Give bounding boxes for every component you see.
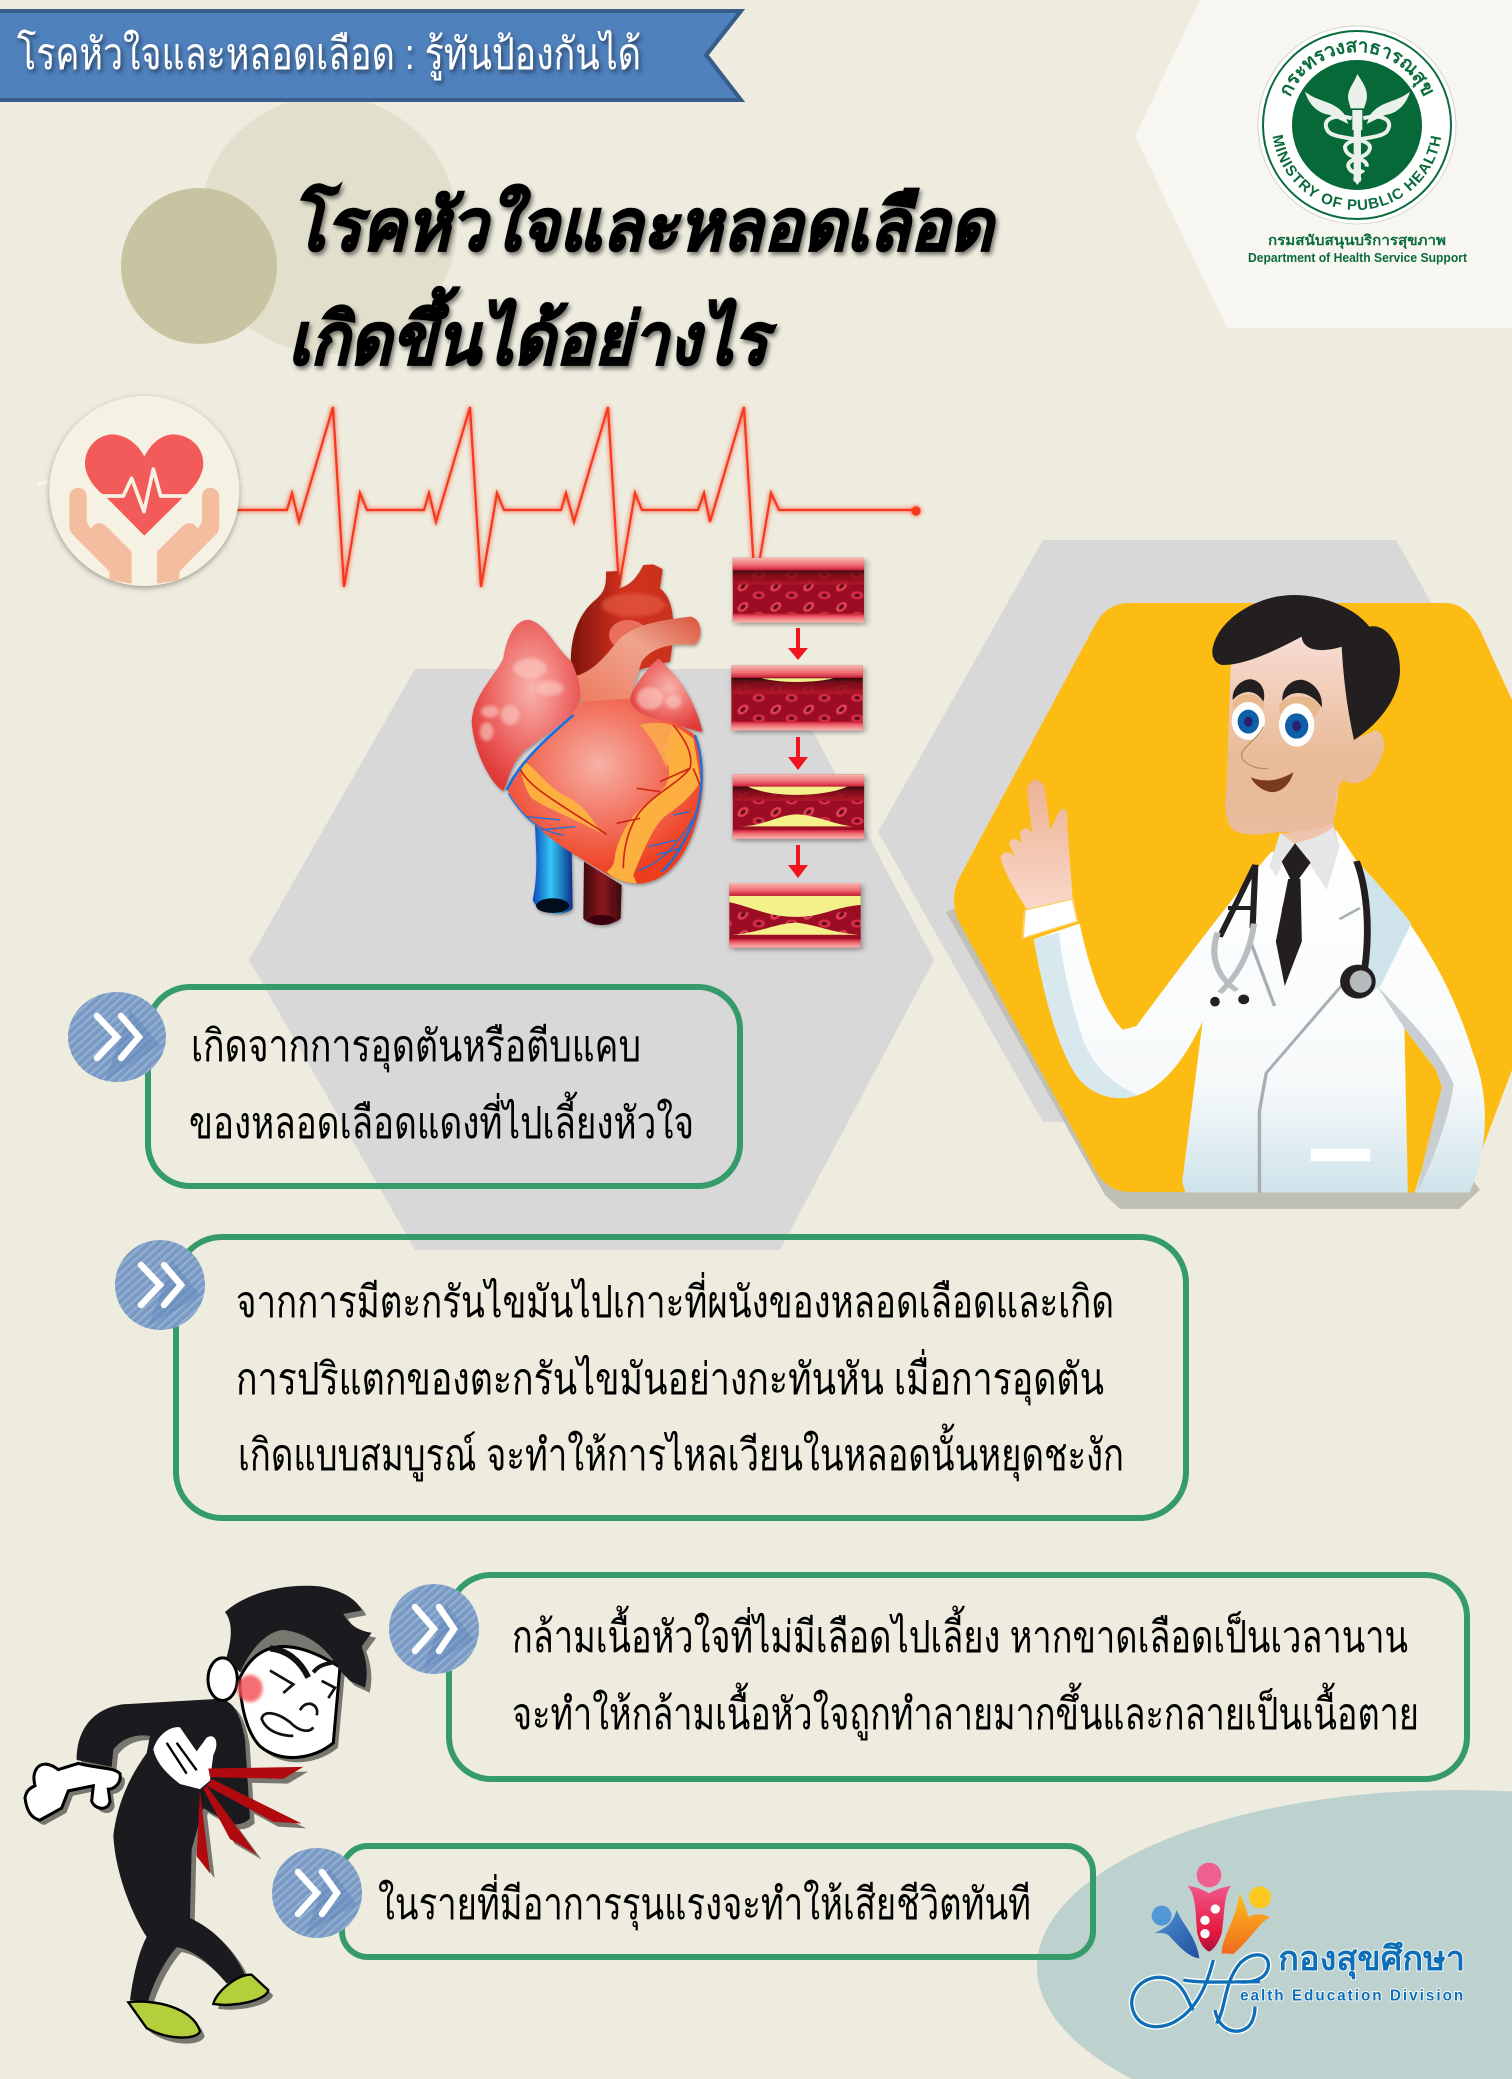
hair [1212, 595, 1400, 740]
script H [1132, 1955, 1268, 2031]
blue person [1152, 1906, 1199, 1958]
box 2 text [236, 1271, 1124, 1482]
pocket [1311, 1149, 1370, 1161]
text box 1 [148, 987, 740, 1186]
eye socket right [1279, 696, 1320, 720]
face [240, 1647, 340, 1758]
heart [85, 434, 203, 536]
artery stage 2 [731, 665, 863, 730]
artery stage 1 [733, 558, 864, 623]
main title: โรคหัวใจและหลอดเลือด [290, 183, 997, 266]
bullet icon 2 [115, 1240, 205, 1330]
nose [1242, 727, 1268, 769]
logo: Health Education Division [1132, 1863, 1465, 2031]
blush [237, 1675, 263, 1702]
hand pointing [1001, 780, 1075, 923]
hair [225, 1586, 372, 1688]
figure shadow [30, 1591, 376, 2044]
illustration: man with chest pain [25, 1586, 376, 2044]
doctor yellow hexagon shadow [946, 800, 1480, 1209]
arrow: artery stage 1 to 2 [788, 628, 808, 660]
main title [288, 183, 997, 380]
artery stage 3 [733, 774, 864, 839]
stethoscope [1220, 865, 1255, 937]
icon: heart in hands [37, 396, 241, 586]
gray hexagon right [878, 540, 1512, 1122]
bullet icon 1 [68, 992, 166, 1082]
box 2 text: การปริแตกของตะกรันไขมันอย่างกะทันหัน เมื่อการอุดตัน [236, 1348, 1104, 1406]
box 1 text: ของหลอดเลือดแดงที่ไปเลี้ยงหัวใจ [189, 1091, 694, 1148]
pulse in heart [102, 469, 188, 512]
decorative small circle [121, 188, 277, 344]
arrow: artery stage 2 to 3 [788, 737, 808, 770]
neck [1280, 787, 1339, 853]
logo panel background [1135, 0, 1512, 328]
pink person [1188, 1863, 1231, 1952]
grimace [262, 1648, 335, 1736]
doctor yellow hexagon [954, 603, 1512, 1192]
mouth [1251, 772, 1293, 792]
division Thai name: กองสุขศึกษา [1278, 1940, 1465, 1980]
yellow person [1222, 1886, 1271, 1954]
gray hexagon left [249, 669, 934, 1250]
eyebrows [1233, 679, 1322, 707]
caduceus emblem [1305, 74, 1410, 185]
collar [1269, 827, 1339, 890]
body [77, 1699, 250, 2001]
teal ellipse background [1037, 1790, 1512, 2079]
division English name: ealth Education Division [1240, 1988, 1463, 2005]
blue vessel [533, 825, 573, 914]
logo: Ministry of Public Health [1248, 26, 1468, 265]
atrium bumps [480, 658, 681, 741]
lapel lines [1251, 908, 1360, 1192]
tie knot [1282, 843, 1311, 910]
ventricle [507, 698, 703, 884]
shirt cuff [1023, 899, 1077, 938]
department English name: Department of Health Service Support [1248, 251, 1468, 265]
inner sleeve gray [1377, 986, 1454, 1192]
box 2 text: จากการมีตะกรันไขมันไปเกาะที่ผนังของหลอดเลือดและเกิด [236, 1271, 1114, 1327]
left shoe [128, 2002, 200, 2038]
pain rays [197, 1767, 303, 1873]
left arm shading [1034, 932, 1138, 1098]
banner heading: โรคหัวใจและหลอดเลือด : รู้ทันป้องกันได้ [17, 29, 641, 81]
text box 3 [449, 1575, 1467, 1779]
pulmonary artery arch [573, 617, 700, 702]
aorta [571, 564, 673, 682]
face [1225, 637, 1384, 835]
box 4 text: ในรายที่มีอาการรุนแรงจะทำให้เสียชีวิตทันที [378, 1873, 1031, 1931]
box 1 text: เกิดจากการอุดตันหรือตีบแคบ [191, 1022, 641, 1073]
tie lower [1276, 879, 1302, 986]
artery panels [729, 558, 864, 948]
coat [1034, 830, 1485, 1192]
right shoe [213, 1975, 268, 2005]
decorative large circle [199, 96, 457, 354]
finger lines [167, 1743, 197, 1774]
illustration: human heart [472, 564, 703, 925]
right hand [157, 488, 219, 584]
doctor head [1212, 595, 1400, 910]
left atrium lobe [472, 620, 580, 791]
artery stage 4 [729, 883, 861, 948]
chest hand [153, 1727, 216, 1789]
left fat band [521, 762, 602, 833]
eye sockets [1232, 694, 1264, 716]
main title: เกิดขึ้นได้อย่างไร [288, 286, 777, 380]
ear [208, 1658, 237, 1701]
eyes [1232, 702, 1314, 747]
right fat band [607, 725, 701, 883]
ECG heartbeat line [236, 407, 920, 587]
top fat band [640, 723, 677, 768]
bullet icon 3 [389, 1584, 479, 1674]
gap between body and arm [1404, 1028, 1442, 1192]
doctor body [1001, 780, 1485, 1192]
coronary arteries [520, 725, 700, 868]
box 3 text [512, 1605, 1419, 1741]
seal ring text: กระทรวงสาธารณสุข [1282, 40, 1434, 96]
seal ring text [1272, 40, 1441, 210]
department Thai name: กรมสนับสนุนบริการสุขภาพ [1268, 232, 1446, 249]
bullet icon 4 [272, 1848, 362, 1938]
blue coronary veins [507, 715, 702, 872]
pulmonary bulge [609, 620, 648, 650]
aorta upper highlight [602, 593, 665, 617]
text box 4 [342, 1846, 1093, 1957]
seal ring text: MINISTRY OF PUBLIC HEALTH [1272, 134, 1441, 210]
box 1 text [189, 1022, 694, 1148]
left hand [69, 488, 132, 584]
box 2 text: เกิดแบบสมบูรณ์ จะทำให้การไหลเวียนในหลอดนั้นหยุดชะงัก [238, 1423, 1124, 1482]
text box 2 [176, 1237, 1186, 1518]
arrow: artery stage 3 to 4 [788, 845, 808, 878]
dark vessel [583, 862, 622, 925]
left fist [25, 1763, 120, 1820]
right atrium lobe [628, 658, 703, 732]
right shoulder blue [1357, 861, 1411, 999]
banner ribbon [0, 9, 745, 102]
illustration: doctor [1001, 595, 1485, 1192]
